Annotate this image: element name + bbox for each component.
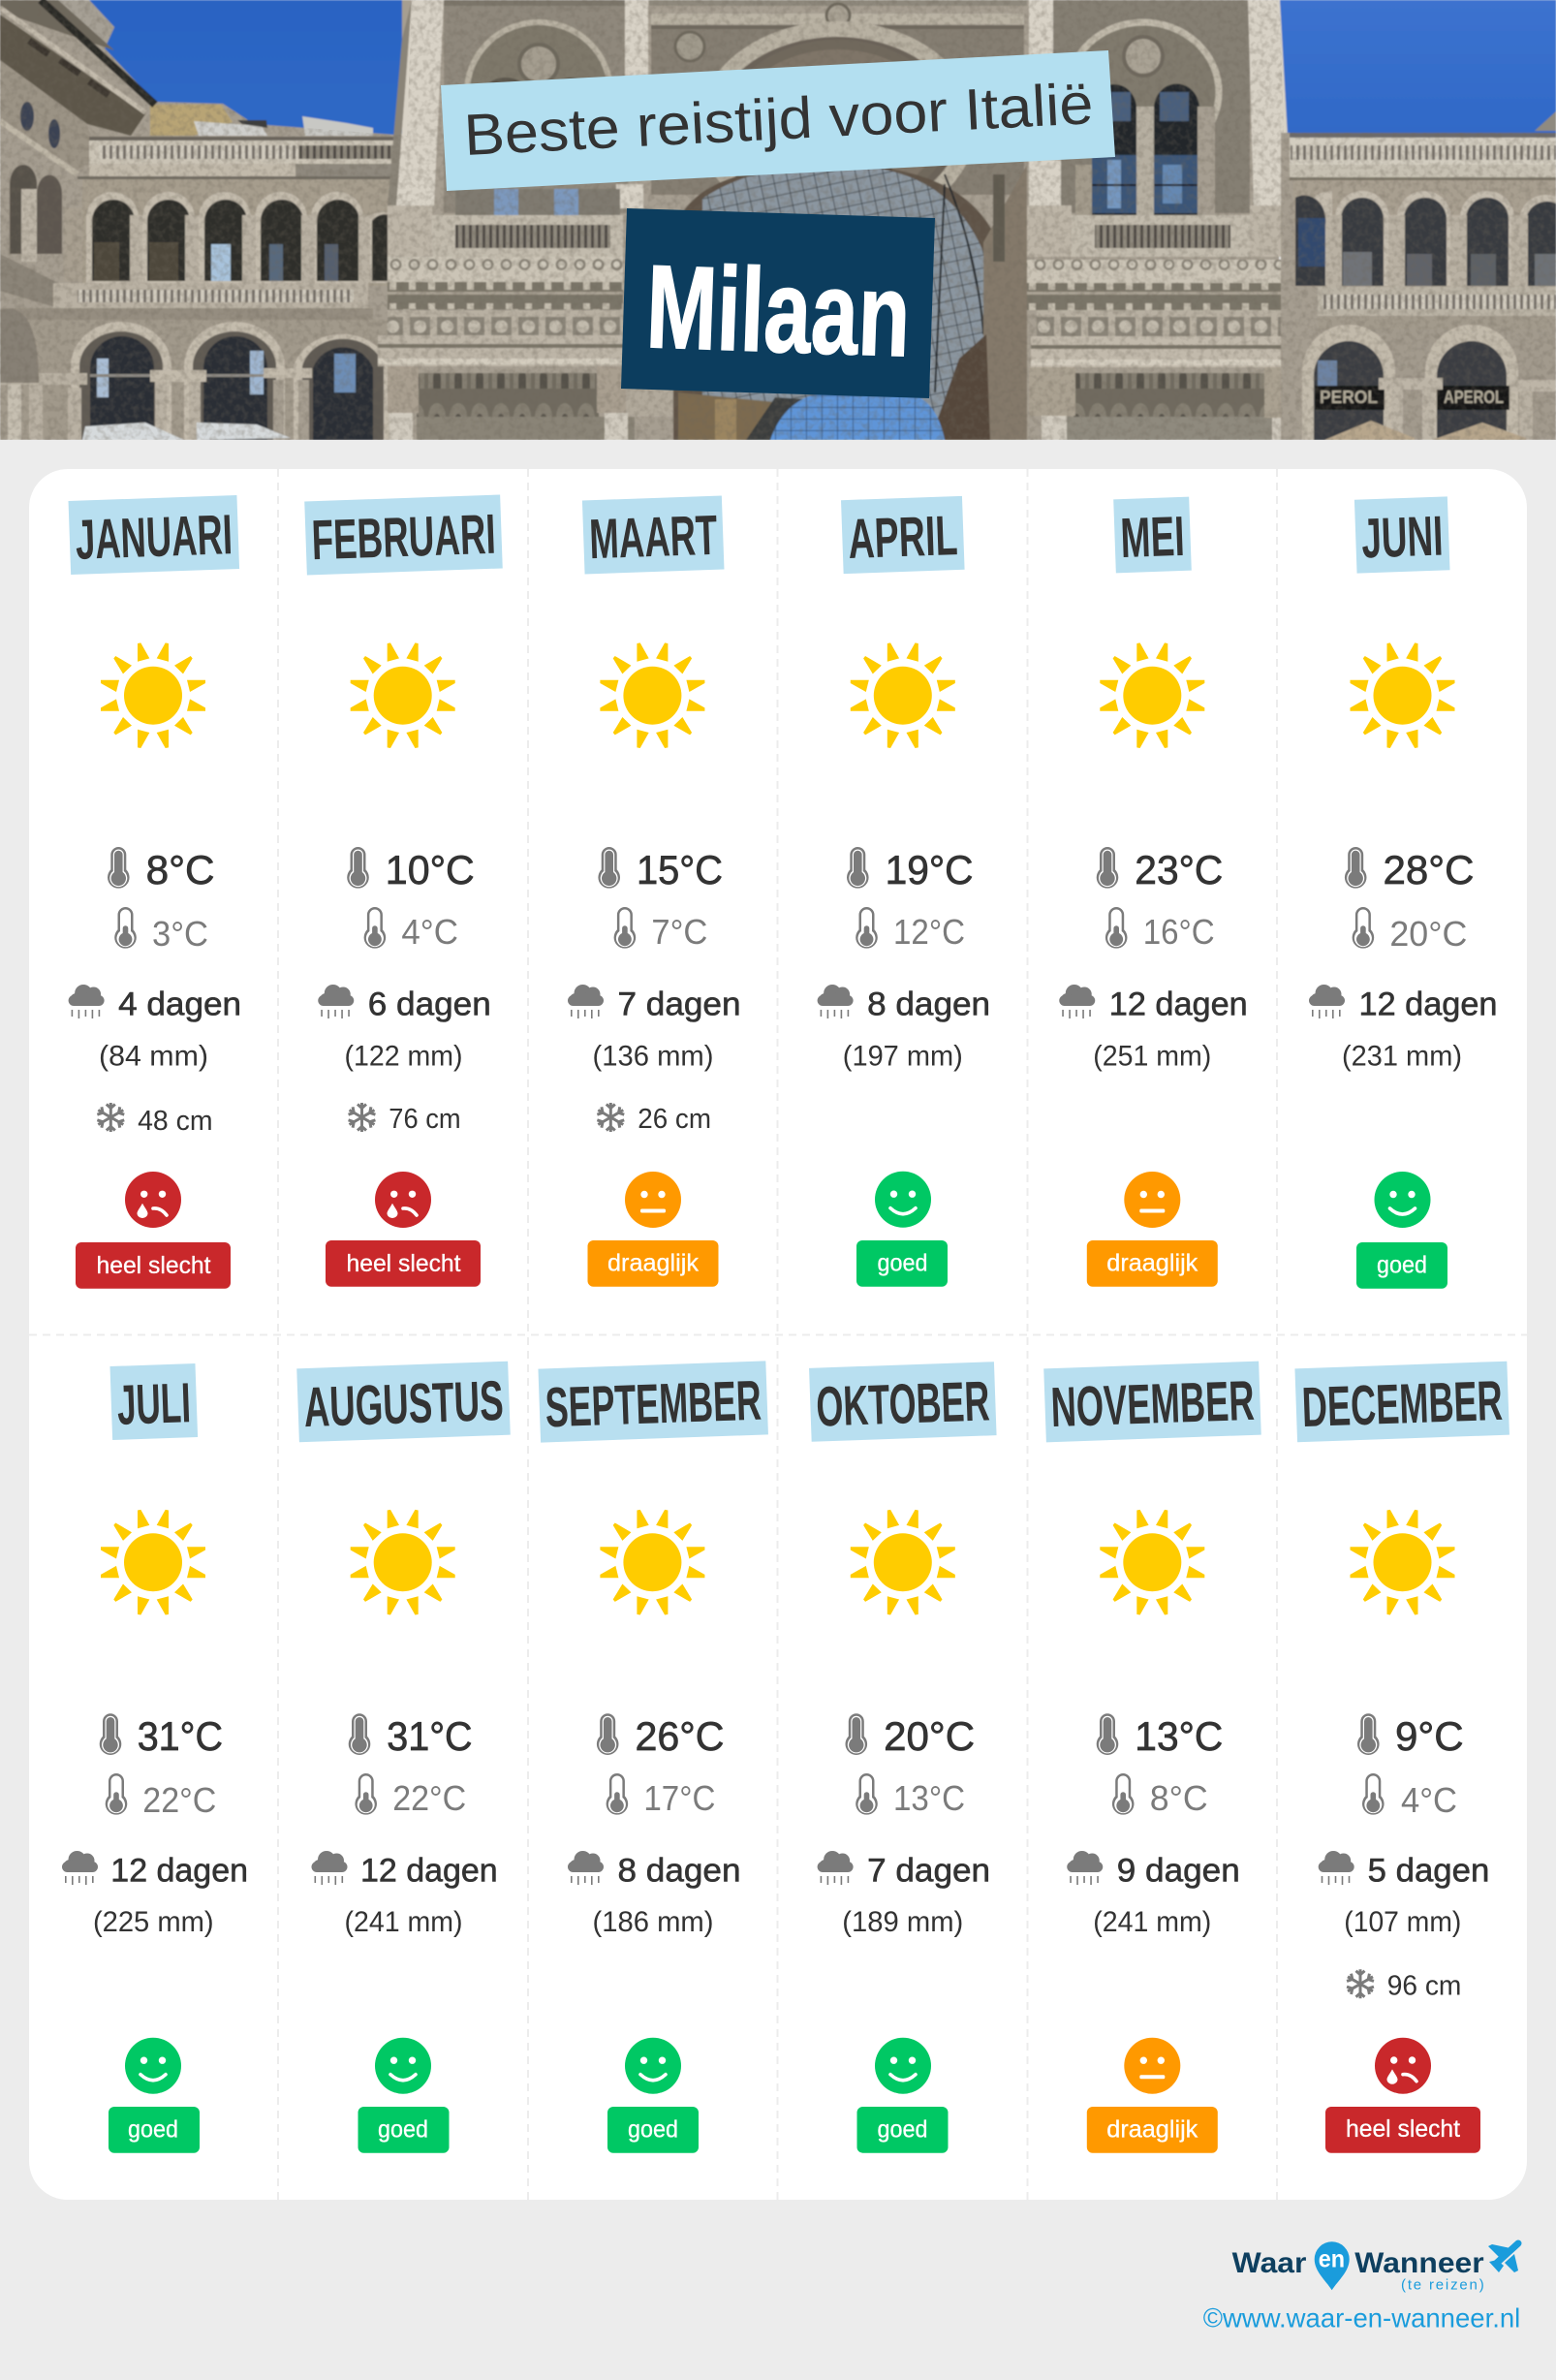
- rain days: 6 dagen: [368, 986, 491, 1023]
- min temperature: [856, 1773, 965, 1818]
- aperol signs: PEROL: [1320, 388, 1378, 407]
- icon: sun: [1100, 1510, 1204, 1614]
- min temperature: [856, 907, 965, 952]
- icon: rating face: [1375, 2038, 1431, 2094]
- rain days: 12 dagen: [1109, 986, 1248, 1023]
- min temperature: [364, 907, 458, 952]
- max temperature: 8°C: [146, 847, 215, 892]
- month label: APRIL: [847, 504, 958, 571]
- min temperature: 4°C: [1401, 1780, 1457, 1820]
- rain days: 9 dagen: [1117, 1853, 1240, 1890]
- rain days: [1309, 985, 1498, 1023]
- icon: sun: [101, 1510, 205, 1614]
- snowfall: 96 cm: [1387, 1970, 1461, 2001]
- rain days: 12 dagen: [110, 1853, 248, 1890]
- left wing: [0, 0, 407, 440]
- icon: sun: [851, 1510, 955, 1614]
- month label: AUGUSTUS: [303, 1369, 505, 1439]
- month label: [1113, 497, 1192, 573]
- rating badge: goed: [378, 2116, 428, 2144]
- max temperature: [1097, 1713, 1223, 1759]
- website credit: ©www.waar-en-wanneer.nl: [1203, 2303, 1520, 2333]
- max temperature: [349, 1713, 473, 1759]
- max temperature: [100, 1713, 223, 1759]
- rainfall: (225 mm): [93, 1906, 214, 1938]
- rainfall: (107 mm): [1344, 1906, 1461, 1938]
- min temperature: 17°C: [643, 1778, 715, 1818]
- snowfall: 48 cm: [138, 1106, 213, 1137]
- rating badge: [1087, 1240, 1218, 1287]
- rain days: [568, 985, 740, 1023]
- min temperature: [1353, 907, 1467, 954]
- max temperature: 23°C: [1135, 847, 1223, 892]
- stone columns: [396, 0, 1291, 208]
- max temperature: 19°C: [886, 847, 974, 892]
- min temperature: [355, 1773, 466, 1818]
- month: februari: [304, 494, 503, 1287]
- max temperature: [597, 1713, 725, 1759]
- month label: JUNI: [1360, 505, 1444, 570]
- month label: [1354, 496, 1449, 574]
- rating badge: [1087, 2107, 1218, 2153]
- icon: rating face: [1124, 2038, 1180, 2094]
- max temperature: [598, 847, 723, 892]
- month: april: [818, 496, 990, 1287]
- panel: monthly climate table: [29, 469, 1527, 2200]
- min temperature: 13°C: [893, 1778, 965, 1818]
- snowfall: 26 cm: [638, 1104, 711, 1135]
- max temperature: 26°C: [636, 1713, 725, 1759]
- icon: sun: [851, 642, 955, 748]
- min temperature: 7°C: [651, 912, 707, 952]
- rainfall: (241 mm): [1093, 1906, 1211, 1938]
- rainfall: (84 mm): [99, 1040, 208, 1072]
- rating badge: goed: [1377, 1252, 1427, 1279]
- rating badge: [607, 2107, 699, 2153]
- month label: [809, 1362, 997, 1442]
- rating badge: [326, 1240, 481, 1287]
- icon: map pin: [1315, 2241, 1350, 2290]
- icon: sun: [600, 642, 704, 748]
- icon: sun: [600, 1510, 704, 1614]
- rating badge: heel slecht: [347, 1250, 461, 1277]
- rating badge: [587, 1240, 719, 1287]
- aperol signs: APEROL: [1444, 388, 1504, 407]
- logo: Waar en Wanneer: [1232, 2241, 1518, 2294]
- rating badge: [856, 2107, 948, 2153]
- month: oktober: [809, 1362, 997, 2153]
- month: juni: [1309, 496, 1498, 1289]
- rainfall: (136 mm): [593, 1040, 713, 1072]
- rainfall: (231 mm): [1342, 1040, 1462, 1072]
- month label: OKTOBER: [815, 1369, 990, 1439]
- max temperature: [847, 847, 974, 892]
- icon: sun: [351, 642, 455, 748]
- balconies: [378, 205, 1323, 440]
- month label: JULI: [116, 1371, 192, 1437]
- icon: sun: [1351, 642, 1455, 748]
- title banner: Beste reistijd voor Italië: [462, 71, 1095, 168]
- max temperature: 20°C: [884, 1713, 975, 1759]
- rain days: [818, 1851, 990, 1890]
- aperol signs: [1320, 388, 1504, 407]
- min temperature: [106, 1773, 216, 1820]
- rating badge: draaglijk: [1106, 1250, 1198, 1277]
- icon: sun: [1100, 642, 1204, 748]
- month label: FEBRUARI: [311, 503, 497, 572]
- logo: Waar en Wanneer: (te reizen): [1401, 2277, 1484, 2294]
- min temperature: 22°C: [392, 1778, 466, 1818]
- icon: rating face: [875, 1172, 931, 1228]
- month label: [1043, 1362, 1261, 1442]
- month: mei: [1059, 497, 1248, 1287]
- max temperature: 31°C: [138, 1713, 223, 1759]
- max temperature: 31°C: [387, 1713, 473, 1759]
- city name box: [621, 208, 935, 398]
- min temperature: 22°C: [142, 1780, 216, 1820]
- min temperature: [114, 907, 208, 954]
- month: september: [538, 1361, 768, 2153]
- icon: rating face: [375, 1172, 431, 1228]
- min temperature: 8°C: [1150, 1778, 1208, 1818]
- rain days: [568, 1851, 740, 1890]
- rain days: [1059, 985, 1248, 1023]
- rating badge: [76, 1242, 231, 1289]
- max temperature: 9°C: [1395, 1713, 1464, 1759]
- rating badge: heel slecht: [1346, 2115, 1460, 2143]
- rating badge: [358, 2107, 450, 2153]
- snowfall: [347, 1103, 461, 1135]
- month: november: [1043, 1362, 1261, 2153]
- glass vault: [673, 165, 1027, 440]
- icon: rating face: [1374, 1172, 1430, 1228]
- min temperature: 3°C: [152, 914, 208, 954]
- month label: [110, 1363, 198, 1440]
- month label: [304, 494, 503, 576]
- rain days: 7 dagen: [867, 1853, 990, 1890]
- min temperature: 20°C: [1389, 914, 1467, 954]
- max temperature: [1357, 1713, 1464, 1759]
- icon: sun: [101, 642, 205, 748]
- icon: rating face: [875, 2038, 931, 2094]
- rain days: 4 dagen: [118, 986, 241, 1023]
- rain days: 7 dagen: [618, 986, 740, 1023]
- month: januari: [69, 495, 241, 1289]
- month label: [582, 496, 724, 574]
- month label: MAART: [588, 504, 718, 571]
- icon: map pin: en: [1319, 2245, 1345, 2272]
- rainfall: (197 mm): [843, 1040, 963, 1072]
- rain days: [69, 985, 241, 1023]
- icon: rating face: [625, 1172, 681, 1228]
- max temperature: [108, 847, 215, 892]
- rain days: [318, 985, 491, 1023]
- icon: airplane: [1488, 2243, 1518, 2272]
- rainfall: (186 mm): [593, 1906, 713, 1938]
- icon: sun: [1351, 1510, 1455, 1614]
- month label: NOVEMBER: [1050, 1369, 1256, 1439]
- max temperature: 13°C: [1135, 1713, 1223, 1759]
- logo: Waar en Wanneer: Wanneer: [1354, 2247, 1484, 2279]
- icon: rating face: [125, 1172, 181, 1228]
- rain days: 12 dagen: [1358, 986, 1498, 1023]
- month: december: [1294, 1362, 1509, 2153]
- month: juli: [62, 1363, 248, 2153]
- min temperature: [1112, 1773, 1208, 1818]
- title banner: [441, 50, 1115, 191]
- rating badge: goed: [878, 1250, 928, 1277]
- icon: sun: [351, 1510, 455, 1614]
- min temperature: [1105, 907, 1215, 952]
- month label: SEPTEMBER: [545, 1369, 762, 1439]
- max temperature: [1097, 847, 1223, 892]
- max temperature: 10°C: [386, 847, 475, 892]
- rain days: 8 dagen: [867, 986, 990, 1023]
- month: maart: [568, 496, 740, 1287]
- logo: Waar en Wanneer: Waar: [1232, 2247, 1307, 2279]
- rating badge: draaglijk: [607, 1250, 699, 1277]
- rating badge: [856, 1240, 948, 1287]
- icon: rating face: [125, 2038, 181, 2094]
- max temperature: 28°C: [1384, 847, 1475, 892]
- month label: MEI: [1119, 505, 1186, 570]
- rating badge: draaglijk: [1106, 2116, 1198, 2144]
- rating badge: [109, 2107, 200, 2153]
- snowfall: [1346, 1969, 1461, 2001]
- month: augustus: [296, 1362, 511, 2153]
- rainfall: (189 mm): [842, 1906, 963, 1938]
- rating badge: goed: [878, 2116, 928, 2144]
- rating badge: [1356, 1242, 1447, 1289]
- central bay: [378, 0, 1323, 440]
- rating badge: [1325, 2107, 1480, 2153]
- snowfall: [596, 1103, 711, 1135]
- icon: rating face: [1124, 1172, 1180, 1228]
- snowfall: [96, 1103, 213, 1137]
- rating badge: goed: [128, 2116, 178, 2144]
- right wing: [1281, 111, 1556, 440]
- rain days: 8 dagen: [618, 1853, 740, 1890]
- max temperature: [347, 847, 475, 892]
- min temperature: 16°C: [1143, 912, 1215, 952]
- min temperature: 4°C: [401, 912, 458, 952]
- header photo: galleria building: [0, 0, 1556, 440]
- month label: [69, 495, 239, 575]
- icon: rating face: [625, 2038, 681, 2094]
- rating badge: goed: [628, 2116, 678, 2144]
- icon: rating face: [375, 2038, 431, 2094]
- rain days: [1067, 1851, 1240, 1890]
- rain days: 12 dagen: [360, 1853, 498, 1890]
- min temperature: [1362, 1773, 1457, 1820]
- rain days: [818, 985, 990, 1023]
- rating badge: heel slecht: [97, 1252, 211, 1279]
- rainfall: (251 mm): [1093, 1040, 1211, 1072]
- rainfall: (122 mm): [345, 1040, 463, 1072]
- month label: JANUARI: [75, 503, 233, 572]
- min temperature: [607, 1773, 715, 1818]
- max temperature: 15°C: [637, 847, 723, 892]
- min temperature: [614, 907, 707, 952]
- rain days: [1319, 1851, 1489, 1890]
- month label: [841, 496, 965, 574]
- rainfall: (241 mm): [345, 1906, 463, 1938]
- month label: [296, 1362, 511, 1442]
- snowfall: 76 cm: [389, 1104, 461, 1135]
- min temperature: 12°C: [893, 912, 965, 952]
- month label: [538, 1361, 768, 1443]
- rain days: 5 dagen: [1368, 1853, 1489, 1890]
- city name box: Milaan: [644, 240, 913, 381]
